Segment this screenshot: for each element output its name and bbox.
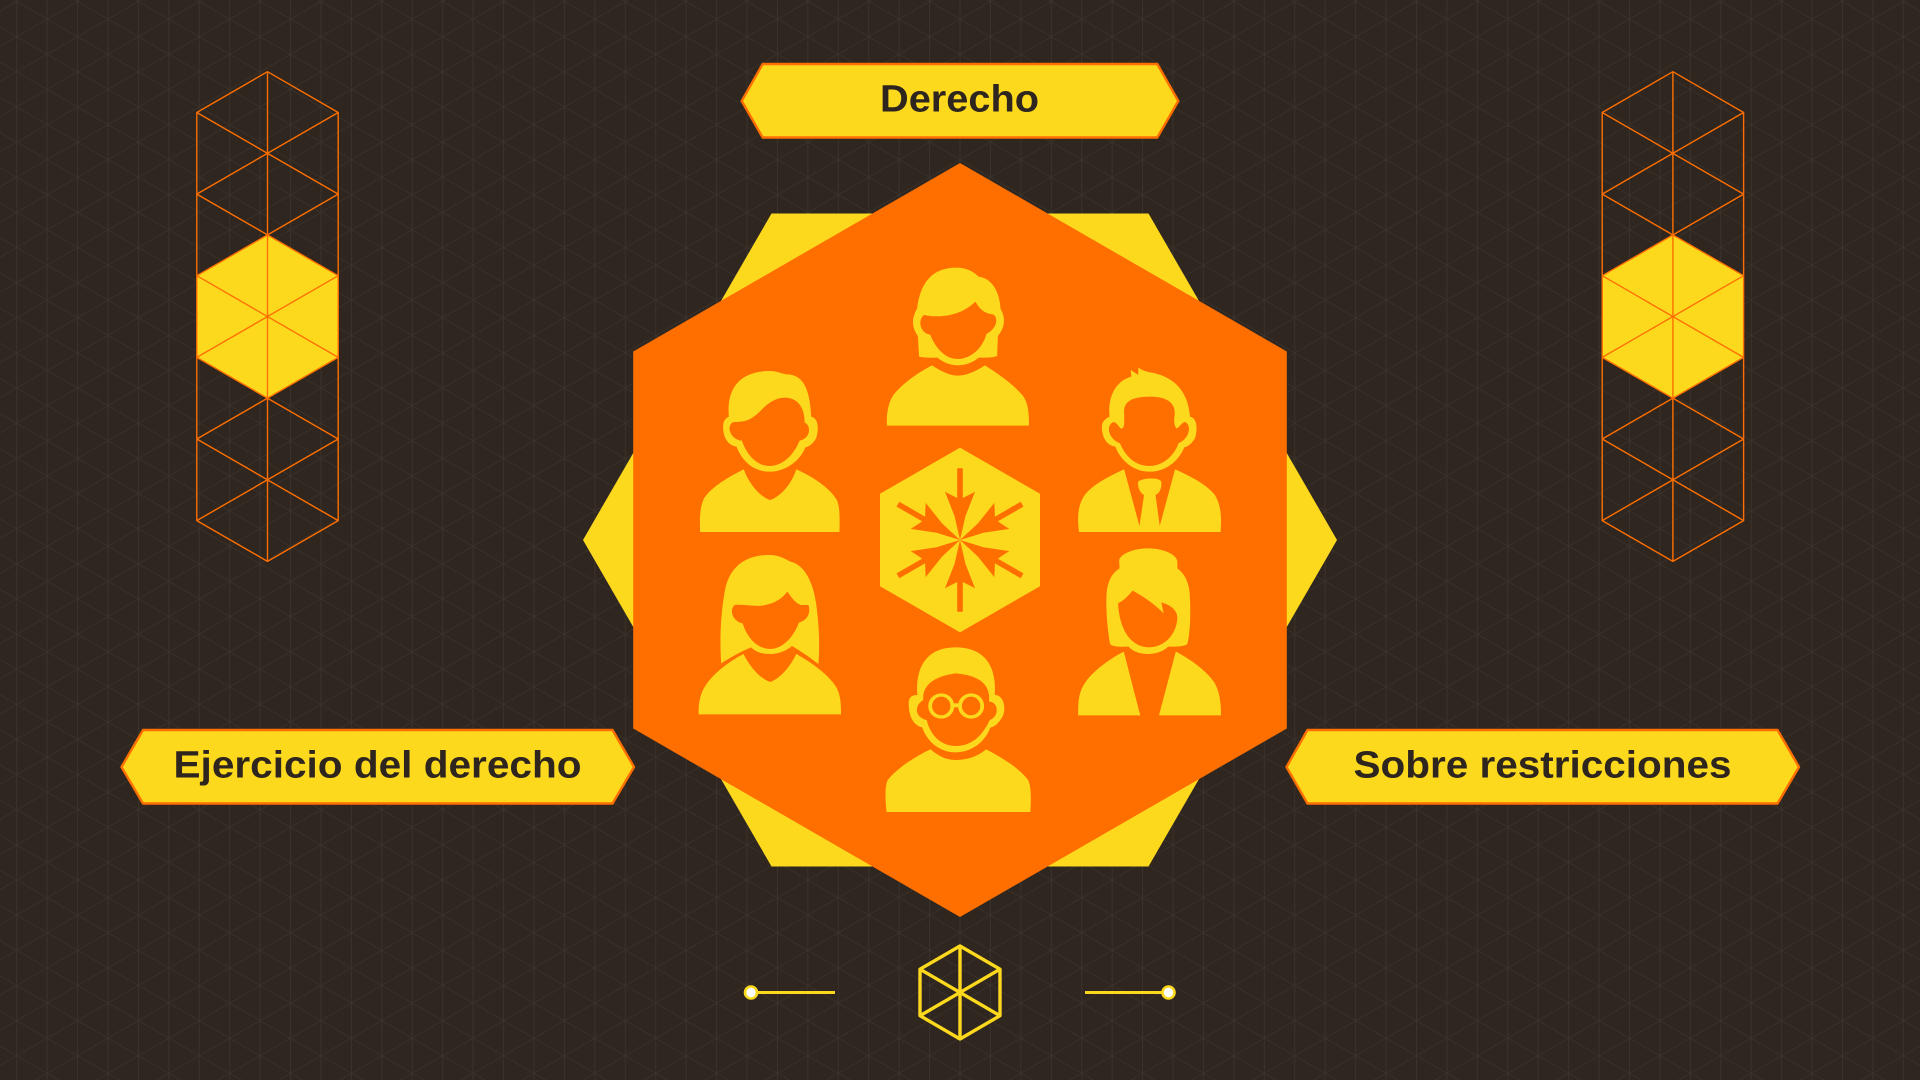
orange front hexagon [633, 163, 1287, 917]
banner: Ejercicio del derecho: Ejercicio del derecho [174, 744, 582, 786]
icon: person bottom centre, boy with glasses [885, 647, 1031, 812]
wireframe lines [1602, 72, 1744, 561]
yellow back hexagon [583, 214, 1337, 866]
icon: person lower left, woman with long hair [699, 555, 841, 714]
heading banner: Derecho: Derecho [880, 79, 1039, 121]
left wireframe hexagon column [197, 72, 338, 561]
icon: person upper left, man with side-swept hair [700, 371, 840, 532]
banner: Ejercicio del derecho [122, 730, 634, 804]
right wireframe hexagon column [1602, 72, 1744, 561]
highlighted yellow hexagon [197, 235, 338, 398]
bottom ornament: right line with dot [1085, 986, 1174, 998]
icon: person lower right, woman with hair bun and jacket [1078, 548, 1221, 715]
heading banner: Derecho [742, 64, 1178, 138]
bottom ornament: hexagon cube outline icon [920, 946, 1000, 1039]
wireframe lines [197, 72, 338, 561]
banner: Sobre restricciones [1286, 730, 1799, 804]
banner: Sobre restricciones: Sobre restricciones [1354, 744, 1732, 786]
icon: person upper right, man in suit and tie [1078, 367, 1221, 532]
bottom ornament: left line with dot [745, 986, 835, 998]
icon: person top centre, woman with short hair [887, 268, 1029, 426]
central icon: small hexagon with six-pointed star of arrows [880, 448, 1040, 632]
highlighted yellow hexagon [1602, 235, 1744, 398]
